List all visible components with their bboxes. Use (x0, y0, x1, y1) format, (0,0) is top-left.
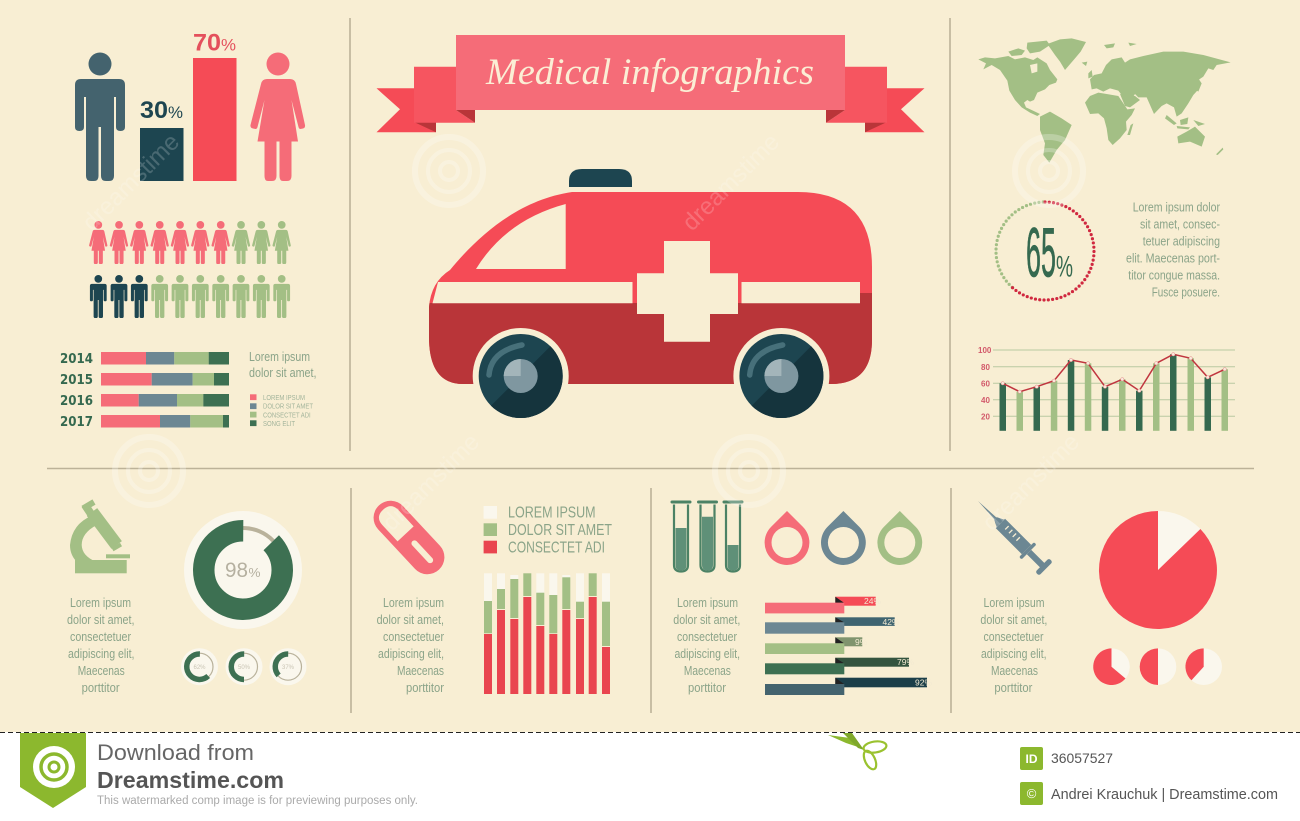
stacked bars: 2014 to 2017: 2017 (60, 415, 93, 430)
text block: syringe: porttitor (994, 681, 1032, 695)
icon: test tubes (672, 502, 742, 572)
icons: drops (765, 511, 922, 565)
pictogram: men row (90, 275, 290, 318)
percent sign: 70 percent: % (221, 36, 236, 54)
text block: syringe (980, 596, 1047, 695)
title ribbon (376, 35, 924, 132)
chart: ribbon bars: 24% (864, 596, 881, 606)
text block: pill: porttitor (406, 681, 444, 695)
pie chart: large (1099, 511, 1217, 629)
illustration: ambulance (420, 169, 880, 424)
body (429, 192, 872, 384)
text block: test tubes: Maecenas (684, 664, 731, 678)
legend: stacked bars: LOREM IPSUM (263, 395, 305, 402)
front wheel (473, 328, 569, 424)
badge: copyright (1020, 782, 1043, 805)
windshield (476, 204, 566, 269)
badge: copyright: © (1027, 786, 1037, 801)
legend: stacked bars: SONG ELIT (263, 421, 296, 428)
chart: bars with line: 80 (981, 363, 990, 372)
text block: microscope: Lorem ipsum (70, 596, 131, 610)
text block: microscope: consectetuer (70, 630, 131, 644)
stacked column chart (484, 573, 610, 694)
text block: gauge description: elit. Maecenas port- (1126, 252, 1220, 266)
small donuts (181, 648, 306, 685)
icon: pill (367, 494, 451, 581)
icon: microscope (70, 502, 130, 573)
text block: syringe: adipiscing elit, (981, 647, 1046, 661)
panel: gender comparison (75, 30, 305, 181)
text block: syringe: Lorem ipsum (984, 596, 1044, 610)
small donuts: 37% (282, 665, 295, 671)
legend: stacked bars (250, 394, 314, 428)
chart: ribbon bars: 42% (882, 617, 900, 627)
text block: microscope (67, 596, 134, 695)
legend: pill chart (484, 504, 612, 556)
text block: gauge description: Lorem ipsum dolor (1133, 200, 1220, 214)
rear wheel (733, 328, 829, 424)
watermark overlay: dreamstime (77, 128, 185, 236)
text block: gauge description: tetuer adipiscing (1143, 234, 1220, 248)
chart: bars with line: 100 (978, 346, 992, 355)
icon: syringe (971, 494, 1053, 576)
legend: stacked bars: CONSECTET ADI (263, 412, 311, 419)
text block: syringe: Maecenas (991, 664, 1038, 678)
text block: pill: consectetuer (383, 630, 444, 644)
medical cross (637, 241, 738, 342)
gauge percent sign: % (1056, 250, 1073, 284)
text block: gauge description: Fusce posuere. (1152, 286, 1220, 300)
text block: syringe: dolor sit amet, (980, 613, 1047, 627)
text block: test tubes (673, 596, 740, 695)
text block: gauge description: titor congue massa. (1128, 268, 1220, 282)
text block: test tubes: dolor sit amet, (673, 613, 740, 627)
chart: ribbon bars (765, 596, 932, 695)
text block: microscope: Maecenas (78, 664, 125, 678)
text block: bars caption (249, 350, 316, 380)
text block: pill (377, 596, 444, 695)
legend: pill chart: LOREM IPSUM (508, 504, 596, 522)
icon: scissors (828, 733, 887, 771)
stacked bars: 2014 to 2017 (60, 352, 229, 430)
chart: ribbon bars: 9% (855, 637, 868, 647)
footer heading: Download from (97, 740, 254, 765)
text block: microscope: porttitor (82, 681, 120, 695)
icon: woman (250, 52, 305, 181)
badge: ID (1020, 747, 1043, 770)
footer badge (20, 733, 86, 808)
stacked bars: 2014 to 2017: 2015 (60, 373, 93, 388)
legend: pill chart: CONSECTET ADI (508, 540, 605, 556)
text block: gauge description (1126, 200, 1220, 300)
beacon (569, 169, 632, 187)
text block: gauge description: sit amet, consec- (1140, 218, 1220, 232)
footer (0, 732, 1300, 821)
text block: pill: dolor sit amet, (377, 613, 444, 627)
text block: test tubes: Lorem ipsum (677, 596, 738, 610)
text block: syringe: consectetuer (984, 630, 1044, 644)
stripes (432, 282, 860, 303)
text block: test tubes: consectetuer (677, 630, 737, 644)
text block: pill: Maecenas (397, 664, 444, 678)
text block: pill: Lorem ipsum (383, 596, 444, 610)
icon: man (75, 52, 125, 181)
legend: stacked bars: DOLOR SIT AMET (263, 404, 314, 411)
title: Medical infographics (485, 52, 814, 93)
gauge: 65 percent (996, 202, 1094, 300)
text block: test tubes: porttitor (688, 681, 726, 695)
watermark overlay: dreamstime (977, 428, 1085, 536)
text block: test tubes: adipiscing elit, (674, 647, 740, 661)
percent sign: 30 percent: % (168, 103, 183, 122)
watermark overlay: dreamstime (677, 128, 785, 236)
chart: ribbon bars: 92% (915, 678, 932, 688)
text block: microscope: adipiscing elit, (68, 647, 134, 661)
pie charts: small (1093, 648, 1222, 685)
watermark overlay: dreamstime (377, 428, 485, 536)
text block: bars caption: dolor sit amet, (249, 366, 316, 380)
chart: bars with line: 40 (981, 396, 990, 405)
bar: 70 percent (193, 58, 236, 181)
text block: microscope: dolor sit amet, (67, 613, 134, 627)
text block: bars caption: Lorem ipsum (249, 350, 310, 364)
legend: pill chart: DOLOR SIT AMET (508, 522, 612, 539)
chart: bars with line: 60 (981, 380, 990, 388)
chart: bars with line (978, 346, 1235, 431)
stacked bars: 2014 to 2017: 2014 (60, 352, 93, 367)
text block: pill: adipiscing elit, (378, 647, 444, 661)
bar: 30 percent (140, 128, 184, 181)
gauge: 65 percent: 65 (1026, 214, 1056, 292)
chart: ribbon bars: 79% (897, 657, 914, 667)
author credit: Andrei Krauchuk | Dreamstime.com (1051, 787, 1278, 803)
watermark overlay (77, 128, 1085, 536)
small donuts: 50% (238, 665, 251, 671)
label: 30 percent: 30 (140, 97, 168, 124)
world map (978, 38, 1231, 163)
small donuts: 62% (193, 665, 206, 671)
badge: ID: ID (1026, 752, 1038, 766)
image number: 36057527 (1051, 750, 1113, 766)
chart: bars with line: 20 (981, 412, 990, 422)
label: 70 percent: 70 (193, 30, 221, 56)
stacked bars: 2014 to 2017: 2016 (60, 394, 93, 409)
footer note: This watermarked comp image is for previewing purposes only. (97, 795, 418, 807)
pictogram: women row (89, 221, 291, 264)
footer brand: Dreamstime.com (97, 767, 284, 793)
donut chart: 98 percent (184, 511, 302, 629)
dividers (47, 18, 1254, 713)
donut percent sign: % (248, 565, 261, 580)
donut value: 98 (225, 559, 248, 582)
